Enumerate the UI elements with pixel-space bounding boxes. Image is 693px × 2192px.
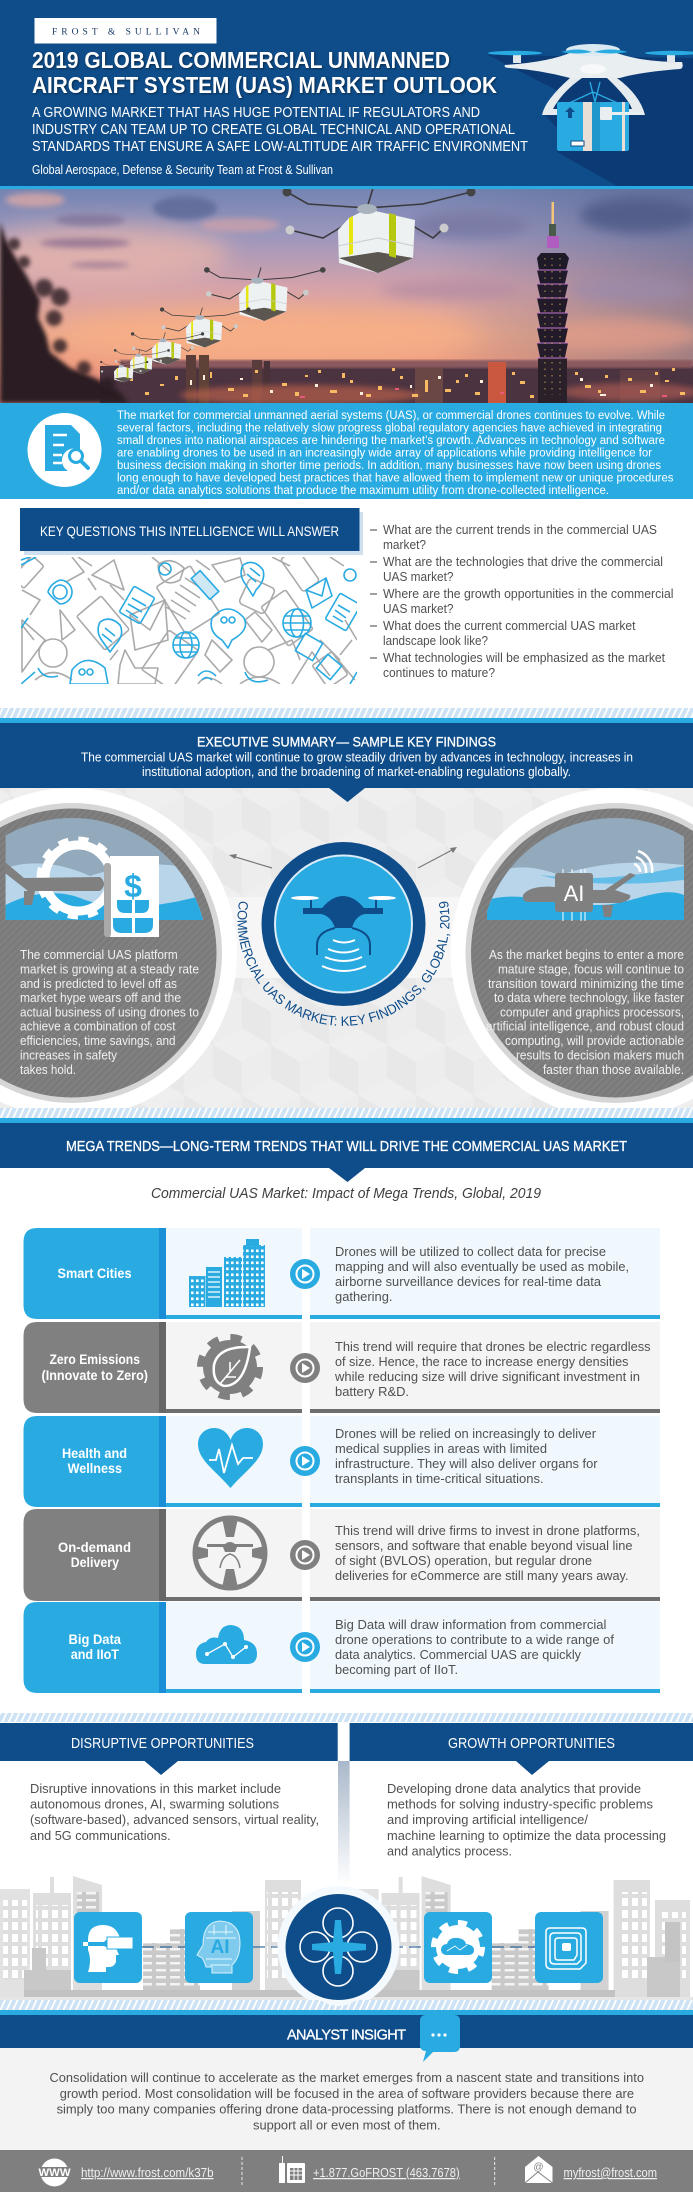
text: left finding: and is predicted to level off as (20, 977, 177, 991)
text: right finding: artificial intelligence, and robust cloud (486, 1020, 684, 1034)
row: Zero Emissions: (Innovate to Zero) (42, 1368, 148, 1383)
text: disruptive: Disruptive innovations in this market include (30, 1781, 281, 1796)
text: intro paragraph: small drones into national airspaces are hindering the market’s growth. Advances in technology and software (117, 435, 665, 447)
icon: play (290, 1446, 320, 1476)
divider hatch (0, 2000, 693, 2010)
text: growth (387, 1781, 666, 1858)
text: growth: methods for solving industry-specific problems (387, 1796, 653, 1812)
text: intro paragraph: business decision making in shorter time periods. In addition, many businesses have now been using drones (117, 460, 661, 472)
text: insight (50, 2070, 644, 2132)
panel: analyst insight (0, 2015, 693, 2150)
text: right finding: faster than those available. (543, 1063, 684, 1077)
text: disruptive: autonomous drones, AI, swarming solutions (30, 1796, 279, 1812)
icon: phone (279, 2156, 305, 2183)
icon: speech bubble (420, 2015, 460, 2062)
row: Big Data and IIoT: drone operations to contribute to a wide range of (335, 1632, 614, 1647)
text: intro paragraph: and/or data analytics solutions that produce the maximum utility from drone-collected intelligence. (117, 485, 609, 497)
row: On-demand Delivery: of sight (BVLOS) operation, but regular drone (335, 1553, 592, 1568)
tile: virtual reality (74, 1912, 142, 1983)
subtitle: INDUSTRY CAN TEAM UP TO CREATE GLOBAL TECHNICAL AND OPERATIONAL (32, 122, 515, 138)
tile: NFC chip (535, 1912, 603, 1983)
row: Zero Emissions: of size. Hence, the race to increase energy densities (335, 1354, 629, 1369)
row: Health and Wellness: infrastructure. They will also deliver organs for (335, 1456, 598, 1471)
heading: mega trends: MEGA TRENDS—LONG-TERM TRENDS THAT WILL DRIVE THE COMMERCIAL UAS MARKET (66, 1139, 627, 1155)
icon: gear (40, 840, 116, 916)
icon: document search (28, 413, 102, 487)
row: Health and Wellness: Wellness (68, 1461, 122, 1476)
list: key questions: continues to mature? (383, 665, 495, 680)
heading: disruptive opportunities (0, 1723, 338, 1775)
text: right finding: to data where technology, like faster (494, 991, 684, 1005)
text: growth: Developing drone data analytics that provide (387, 1781, 641, 1796)
icon: mail: @ (533, 2162, 544, 2173)
list: key questions: landscape look like? (383, 633, 488, 648)
row: Zero Emissions (24, 1322, 660, 1413)
row: Big Data and IIoT: and IIoT (71, 1647, 120, 1662)
attribution: Global Aerospace, Defense & Security Team at Frost & Sullivan (32, 163, 333, 177)
list: key questions: What technologies will be emphasized as the market (383, 650, 665, 665)
divider hatch (0, 1713, 693, 1722)
right circle: mature stage (450, 788, 693, 1118)
row: Smart Cities: Drones will be utilized to collect data for precise (335, 1244, 606, 1259)
divider hatch (0, 708, 693, 718)
text: left finding: achieve a combination of cost (20, 1020, 176, 1034)
hero photo: delivery drones at sunset over city (0, 188, 693, 405)
icon: play (290, 1632, 320, 1662)
divider hatch (0, 1108, 693, 1118)
center badge: drone (262, 842, 426, 1006)
link: phone number: +1.877.GoFROST (463.7678) (313, 2166, 460, 2180)
text: right finding: computing, will provide actionable (505, 1034, 684, 1048)
text: insight: growth period. Most consolidation will be focused in the area of software providers because there are (60, 2086, 634, 2101)
tile: AI head (185, 1912, 253, 1983)
tile: cloud gear (424, 1912, 492, 1983)
text: right finding (486, 948, 684, 1077)
icon: city (189, 1239, 265, 1307)
icon: aircraft (5, 862, 104, 905)
text: summary (81, 750, 633, 779)
skyline (100, 355, 693, 405)
list: key questions (370, 522, 674, 680)
row: On-demand Delivery: This trend will drive firms to invest in drone platforms, (335, 1523, 640, 1538)
text: right finding: mature stage, focus will continue to (498, 962, 684, 976)
arrow: to right circle (418, 847, 457, 868)
row: Big Data and IIoT (24, 1602, 660, 1693)
row: On-demand Delivery (24, 1509, 660, 1601)
heading: mega trends (0, 1123, 693, 1182)
tree silhouette (0, 222, 128, 403)
icon: www: WWW (38, 2167, 71, 2179)
subtitle: A GROWING MARKET THAT HAS HUGE POTENTIAL IF REGULATORS AND (32, 105, 480, 121)
icon: heart (198, 1428, 263, 1488)
heading: disruptive opportunities: DISRUPTIVE OPPORTUNITIES (71, 1736, 254, 1752)
text: growth: machine learning to optimize the data processing (387, 1828, 666, 1843)
list: key questions: What does the current commercial UAS market (383, 618, 636, 633)
icon: AI chip aircraft: AI (564, 881, 584, 906)
list: key questions: UAS market? (383, 569, 454, 584)
heading: growth opportunities (350, 1723, 693, 1775)
illustration: city skyline (0, 1876, 693, 2000)
left circle: platform market (0, 788, 237, 1118)
icon: dollar document (104, 856, 159, 937)
text: left finding: increases in safety (20, 1048, 118, 1062)
list: key questions: What are the current trends in the commercial UAS (383, 522, 657, 537)
row: Health and Wellness: Health and (62, 1446, 127, 1461)
text: insight: support all or even most of them. (253, 2118, 441, 2132)
icon: drone in circle (195, 1518, 265, 1588)
tower: Taipei 101 (537, 202, 569, 403)
heading: EXECUTIVE SUMMARY— SAMPLE KEY FINDINGS (197, 734, 496, 750)
row: Health and Wellness: transplants in time-critical situations. (335, 1471, 544, 1486)
logo: Frost & Sullivan: FROST & SULLIVAN (52, 28, 200, 38)
row: Smart Cities: gathering. (335, 1289, 392, 1304)
row: Smart Cities (24, 1228, 660, 1319)
text: left finding: actual business of using drones to (20, 1006, 199, 1020)
text: intro paragraph: The market for commercial unmanned aerial systems (UAS), or commercial drones continues to evolve. While (117, 410, 665, 422)
row: Zero Emissions: Zero Emissions (50, 1352, 140, 1367)
title: 2019 GLOBAL COMMERCIAL UNMANNED (32, 47, 450, 73)
row: Big Data and IIoT: Big Data will draw information from commercial (335, 1617, 607, 1632)
text: growth: and improving artificial intelligence/ (387, 1812, 588, 1827)
list: key questions: Where are the growth opportunities in the commercial (383, 586, 674, 601)
text: intro paragraph: long enough to have developed best practices that have allowed them to implement new or unique procedures (117, 472, 674, 484)
row: On-demand Delivery: Delivery (71, 1555, 119, 1570)
text: disruptive: and 5G communications. (30, 1828, 171, 1843)
text: left finding (20, 948, 199, 1077)
title (32, 47, 497, 98)
text: disruptive: (software-based), advanced sensors, virtual reality, (30, 1812, 319, 1827)
row: Smart Cities: airborne surveillance devices for real-time data (335, 1274, 602, 1289)
row: Big Data and IIoT: Big Data (68, 1632, 121, 1647)
row: Big Data and IIoT: becoming part of IIoT. (335, 1662, 458, 1677)
row: On-demand Delivery: sensors, and software that enable beyond visual line (335, 1538, 632, 1553)
subtitle (32, 105, 528, 155)
icon: play (290, 1259, 320, 1289)
text: left finding: market is growing at a steady rate (20, 962, 199, 976)
row: Zero Emissions: while reducing size will drive significant investment in (334, 1369, 640, 1384)
logo: Frost & Sullivan (34, 18, 216, 44)
text: right finding: results to decision makers much (516, 1048, 684, 1062)
row: Zero Emissions: This trend will require that drones be electric regardless (335, 1339, 651, 1354)
connector column (338, 1761, 350, 1885)
drones with packages (100, 188, 476, 382)
curved label: COMMERCIAL UAS MARKET: KEY FINDINGS, GLOBAL, 2019 (237, 902, 450, 1026)
panel: key questions heading: KEY QUESTIONS THIS INTELLIGENCE WILL ANSWER (40, 523, 339, 539)
header banner (0, 0, 693, 190)
text: summary: institutional adoption, and the broadening of market-enabling regulations globally. (142, 764, 571, 779)
icon: cloud analytics (196, 1625, 257, 1664)
title: AIRCRAFT SYSTEM (UAS) MARKET OUTLOOK (32, 72, 497, 98)
text: right finding: transition toward minimizing the time (488, 977, 684, 991)
illustration: doodle icon pattern (21, 557, 357, 684)
icon: drone with signal (291, 896, 396, 971)
text: disruptive (30, 1781, 319, 1843)
icon: play (290, 1353, 320, 1383)
row: Smart Cities: Smart Cities (58, 1266, 132, 1281)
heading: growth opportunities: GROWTH OPPORTUNITIES (448, 1736, 615, 1752)
text: intro paragraph: several factors, including the relatively slow progress global regulatory agencies have achieved in integrating (117, 422, 662, 434)
link: website: http://www.frost.com/k37b (81, 2166, 214, 2180)
text: summary: The commercial UAS market will continue to grow steadily driven by advances in technology, increases in (81, 750, 633, 764)
subtitle: STANDARDS THAT ENSURE A SAFE LOW-ALTITUDE AIR TRAFFIC ENVIRONMENT (32, 139, 528, 155)
icon: AI chip aircraft (523, 851, 652, 921)
text: left finding: takes hold. (20, 1063, 76, 1077)
icon: www (38, 2158, 71, 2186)
panel: intro band (0, 403, 693, 499)
icon: mail (525, 2156, 552, 2183)
list: key questions: What are the technologies that drive the commercial (383, 554, 663, 569)
center badge: quadcopter (278, 1886, 400, 2008)
text: right finding: As the market begins to enter a more (489, 948, 684, 962)
text: left finding: market hype wears off and the (20, 991, 181, 1005)
icon: play (290, 1540, 320, 1570)
clouds (0, 193, 693, 361)
icon: gear leaf (201, 1338, 259, 1396)
link: email: myfrost@frost.com (564, 2166, 657, 2180)
text: left finding: The commercial UAS platform (20, 948, 178, 962)
footer (0, 2150, 693, 2192)
icon: delivery drone (488, 44, 693, 186)
list: key questions: market? (383, 537, 426, 552)
text: insight: simply too many companies offering drone data-processing platforms. There is not enough demand to (57, 2102, 637, 2116)
row: On-demand Delivery: On-demand (58, 1540, 131, 1555)
row: Health and Wellness: Drones will be relied on increasingly to deliver (335, 1426, 597, 1441)
text: right finding: computer and graphics processors, (500, 1006, 684, 1020)
row: Zero Emissions: battery R&D. (335, 1384, 409, 1399)
row: Health and Wellness: medical supplies in areas with limited (335, 1441, 547, 1456)
text: growth: and analytics process. (387, 1844, 512, 1858)
row: Health and Wellness (24, 1416, 660, 1507)
icon: dollar document: $ (124, 868, 142, 904)
text: intro paragraph (117, 410, 674, 497)
text: left finding: efficiencies, time savings, and (20, 1034, 176, 1048)
tile: AI head: AI (210, 1937, 230, 1958)
subtitle: mega trends chart: Commercial UAS Market: Impact of Mega Trends, Global, 2019 (151, 1186, 541, 1202)
row: Big Data and IIoT: data analytics. Commercial UAS are quickly (335, 1647, 581, 1662)
list: key questions: UAS market? (383, 601, 454, 616)
heading: ANALYST INSIGHT (287, 2028, 406, 2044)
text: insight: Consolidation will continue to accelerate as the market emerges from a nascent state and transitions into (50, 2070, 644, 2085)
panel: key questions heading (20, 508, 363, 555)
panel: executive summary (0, 723, 693, 1108)
sky scene (487, 810, 684, 920)
row: Smart Cities: mapping and will also eventually be used as mobile, (335, 1259, 629, 1274)
arrow: to left circle (229, 854, 272, 868)
row: On-demand Delivery: deliveries for eCommerce are still many years away. (335, 1568, 628, 1583)
dashed connector line (142, 1946, 535, 1948)
text: intro paragraph: are enabling drones to be used in an increasingly wide array of applications while providing intelligence for (117, 448, 652, 460)
sky scene (6, 810, 204, 920)
